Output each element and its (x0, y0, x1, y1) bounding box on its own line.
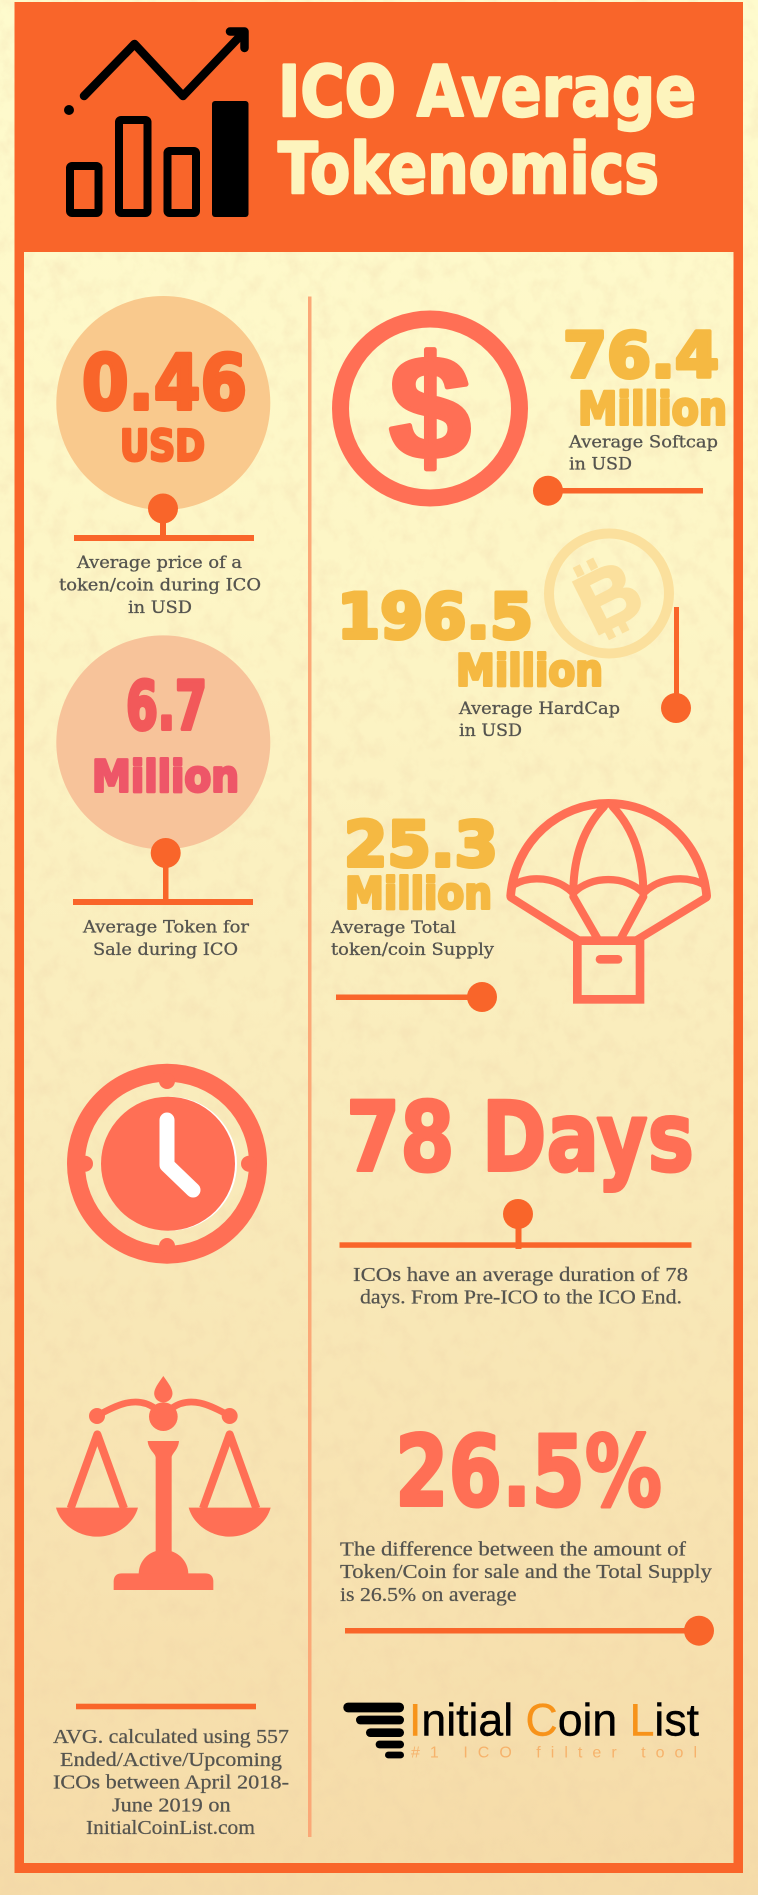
duration caption (353, 1264, 688, 1308)
duration caption: ICOs have an average duration of 78 (353, 1264, 688, 1286)
connector pin (336, 982, 497, 1012)
panel: average softcap (340, 319, 727, 506)
icon: bar chart with rising arrow (64, 32, 248, 217)
hardcap value: 196.5 (337, 580, 533, 653)
icon: bitcoin: B (560, 541, 657, 653)
panel: methodology note (53, 1704, 289, 1839)
logo funnel mark (343, 1703, 404, 1758)
title: Tokenomics (278, 128, 659, 210)
logo tagline: #1 ICO filter tool (411, 1745, 697, 1762)
note rule (76, 1704, 256, 1709)
price unit: USD (120, 422, 205, 472)
panel: average tokens for sale (56, 635, 270, 959)
note text: ICOs between April 2018- (53, 1772, 289, 1794)
price caption (59, 553, 261, 617)
hardcap caption (458, 699, 620, 740)
difference caption: is 26.5% on average (340, 1584, 516, 1606)
icon: dollar coin (340, 319, 520, 498)
icon: parachute with box (511, 803, 707, 999)
panel: average duration (76, 1073, 694, 1308)
sale caption: Average Token for (82, 918, 249, 937)
softcap caption: Average Softcap (568, 433, 718, 452)
supply caption: Average Total (330, 918, 456, 937)
hardcap unit: Million (456, 646, 603, 696)
note text: AVG. calculated using 557 (53, 1726, 289, 1748)
sale circle (56, 635, 270, 849)
icon: dollar coin: $ (389, 326, 471, 489)
hardcap caption: Average HardCap (458, 699, 620, 718)
price caption: token/coin during ICO (59, 576, 261, 594)
softcap caption (568, 433, 718, 474)
note text (53, 1726, 289, 1839)
softcap unit: Million (578, 382, 727, 436)
sale caption (82, 918, 249, 959)
sale caption: Sale during ICO (93, 940, 238, 959)
price caption: Average price of a (76, 553, 242, 572)
connector pin (73, 838, 253, 905)
difference value: 26.5% (395, 1416, 662, 1530)
connector pin (340, 1199, 692, 1249)
price value: 0.46 (82, 338, 247, 427)
difference caption: The difference between the amount of (340, 1539, 686, 1561)
title: ICO Average (278, 51, 696, 133)
sale unit: Million (92, 752, 239, 802)
duration caption: days. From Pre-ICO to the ICO End. (360, 1286, 682, 1308)
supply unit: Million (345, 868, 492, 920)
hardcap caption: in USD (459, 721, 522, 740)
title (278, 51, 696, 210)
supply caption (330, 918, 495, 959)
note text: InitialCoinList.com (86, 1817, 255, 1839)
vertical column divider (308, 296, 312, 1837)
connector pin (533, 476, 703, 506)
note text: Ended/Active/Upcoming (60, 1749, 282, 1771)
difference caption (340, 1539, 713, 1606)
icon: clock (76, 1073, 258, 1255)
price circle (56, 296, 270, 510)
softcap value: 76.4 (563, 319, 719, 392)
panel: average hardcap (337, 534, 691, 740)
panel: average token price (56, 296, 270, 617)
icon: balance scale (56, 1376, 271, 1590)
panel: sale versus supply difference (56, 1376, 714, 1646)
sale value: 6.7 (126, 667, 207, 745)
logo wordmark: Initial Coin List (409, 1695, 699, 1746)
connector pin (345, 1616, 714, 1646)
connector pin (74, 494, 254, 541)
panel: average total supply (330, 803, 707, 1012)
logo: Initial Coin List (343, 1695, 699, 1762)
softcap caption: in USD (569, 455, 632, 474)
supply caption: token/coin Supply (331, 940, 495, 959)
difference caption: Token/Coin for sale and the Total Supply (340, 1561, 713, 1583)
connector pin (661, 607, 691, 723)
note text: June 2019 on (112, 1795, 231, 1817)
supply value: 25.3 (344, 808, 498, 881)
price caption: in USD (128, 598, 192, 617)
